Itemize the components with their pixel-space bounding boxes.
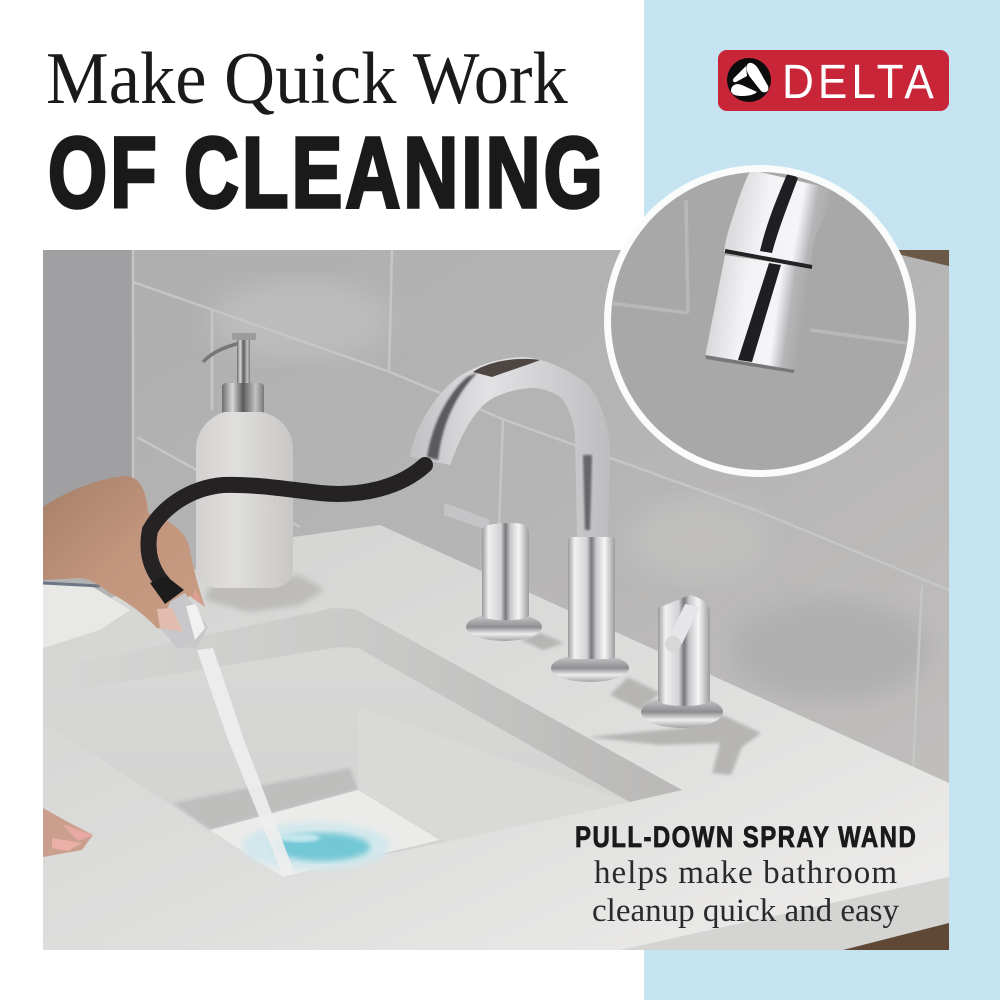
logo wordmark: DELTA: [782, 54, 934, 108]
basin rear lower shadow: [173, 768, 358, 830]
water stream: [197, 648, 295, 876]
soap bottle: [196, 333, 325, 612]
sink basin: [170, 608, 682, 877]
caption line two: cleanup quick and easy: [592, 893, 900, 929]
caption line one: helps make bathroom: [594, 855, 897, 891]
inset black reflection: [738, 172, 798, 362]
inset white ring: [604, 165, 916, 477]
center base: [551, 537, 629, 682]
second hand fingertips: [43, 808, 93, 857]
spray wand: [150, 576, 208, 648]
basin right wall: [576, 802, 628, 814]
rim slope: [201, 608, 682, 802]
faucet handles and base: [444, 504, 761, 775]
right handle: [641, 595, 723, 728]
inset: spray wand close-up: [600, 160, 920, 480]
basin opening: [356, 738, 628, 854]
spout arc: [410, 357, 610, 537]
inset wall: [600, 160, 920, 480]
faucet spout: [410, 357, 610, 537]
spout dark streak: [427, 372, 478, 460]
inset spout tube: [724, 170, 837, 268]
inset nozzle bevel: [705, 355, 795, 373]
bottle body: [196, 412, 293, 588]
counter front edge: [620, 877, 949, 950]
soap foam: [242, 822, 390, 870]
black braided hose: [149, 465, 425, 583]
hand: [43, 476, 205, 632]
left handle: [444, 504, 542, 641]
inset nozzle: [705, 255, 812, 372]
wood cabinet top corner: [899, 250, 949, 266]
background: light blue column: [644, 0, 1000, 1000]
spout neck streak: [583, 455, 592, 530]
logo red badge: [718, 50, 949, 111]
vanity countertop: [43, 525, 949, 950]
inset tile grout: [610, 200, 920, 345]
title line two: OF CLEANING: [48, 117, 603, 228]
faucet shadows on counter: [521, 633, 761, 775]
fingernails: [157, 588, 204, 632]
Delta logo: [718, 50, 949, 111]
tile wall: [43, 250, 949, 810]
logo emblem: [727, 58, 771, 102]
caption: [575, 819, 916, 929]
title: [46, 37, 603, 228]
wood cabinet bottom corner: [843, 923, 949, 950]
bottle shadow: [205, 575, 325, 612]
caption heading: PULL-DOWN SPRAY WAND: [575, 819, 916, 854]
inset contents: [600, 160, 920, 480]
panel: bathroom photo: [43, 250, 949, 950]
bottle pump: [203, 333, 264, 418]
basin floor: [210, 790, 440, 877]
folded towel: [43, 583, 130, 648]
inset O-ring: [725, 251, 812, 267]
spout top reflection: [473, 359, 540, 377]
title line one: Make Quick Work: [46, 37, 569, 119]
